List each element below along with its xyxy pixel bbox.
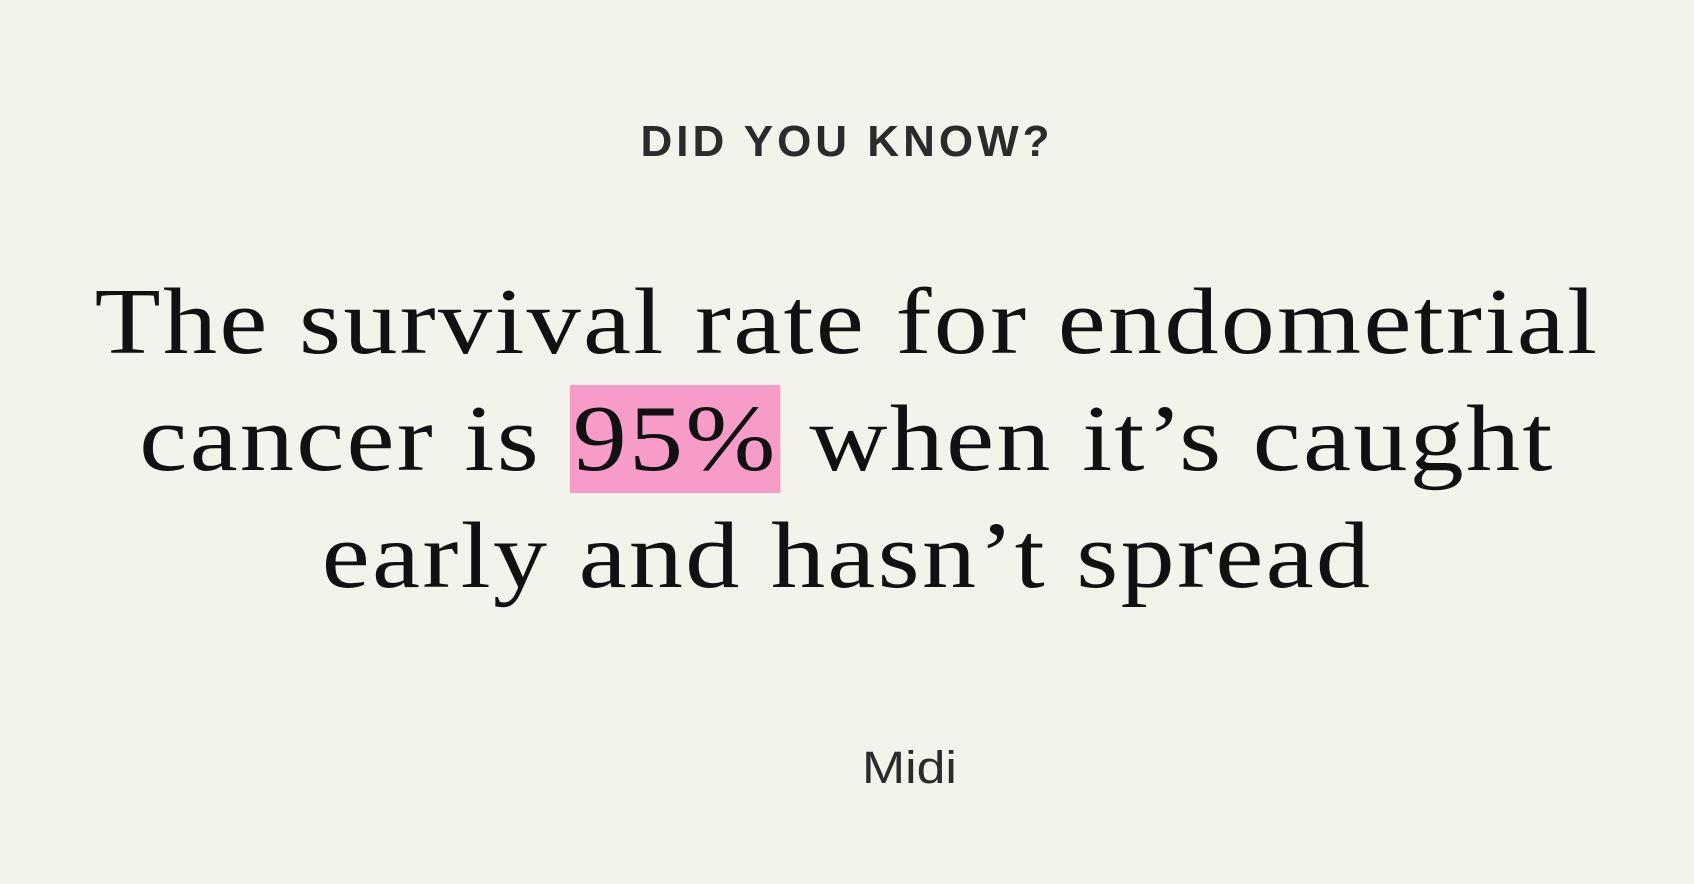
main statement text — [95, 270, 1599, 608]
main statement text: cancer is 95% when it’s caught — [139, 387, 1555, 491]
logo: Midi: Midi — [862, 742, 957, 793]
main statement text: The survival rate for endometrial — [95, 270, 1599, 374]
heading: did you know: DID YOU KNOW? — [641, 117, 1053, 166]
main statement text: early and hasn’t spread — [322, 504, 1372, 608]
